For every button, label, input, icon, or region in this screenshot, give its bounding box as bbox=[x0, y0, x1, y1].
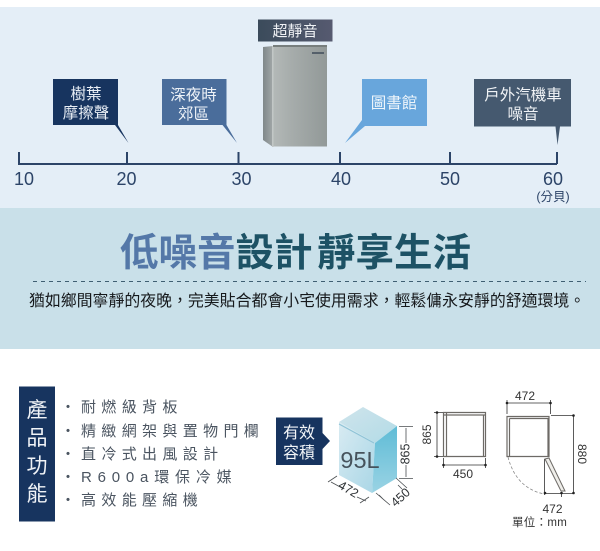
diagram: side view bbox=[420, 411, 487, 481]
panel: low noise headline bbox=[0, 208, 600, 349]
feature list: 直冷式出風設計 bbox=[81, 446, 223, 463]
callout: library 40 dB: 圖書館 bbox=[371, 94, 417, 112]
feature list: ・ bbox=[60, 492, 81, 509]
icon: capacity cube 95L: 865 bbox=[398, 444, 412, 464]
decibel axis: 10 bbox=[14, 169, 34, 189]
decibel axis: 30 bbox=[231, 169, 252, 189]
feature title: 產 bbox=[26, 399, 48, 422]
feature title: 品 bbox=[26, 427, 48, 450]
diagram: side view: 865 bbox=[420, 424, 434, 445]
label: super quiet bbox=[258, 20, 332, 42]
feature title bbox=[19, 386, 55, 522]
decibel axis: (分貝) bbox=[536, 190, 570, 204]
callout: tree leaves 20 dB bbox=[53, 79, 128, 143]
feature list: ・ bbox=[60, 399, 81, 416]
label: effective capacity: 容積 bbox=[283, 444, 315, 462]
feature list: R600a環保冷媒 bbox=[81, 469, 237, 486]
decibel axis: 20 bbox=[116, 169, 137, 189]
callout: car noise 60 dB bbox=[474, 79, 571, 145]
callout: library 40 dB bbox=[345, 79, 427, 143]
description text: 猶如鄉間寧靜的夜晚，完美貼合都會小宅使用需求，輕鬆傭永安靜的舒適環境。 bbox=[29, 291, 585, 310]
feature title: 能 bbox=[26, 483, 48, 506]
callout: car noise 60 dB: 戶外汽機車 bbox=[484, 86, 562, 104]
label: effective capacity bbox=[276, 418, 330, 465]
feature list: 耐燃級背板 bbox=[81, 399, 183, 416]
icon: capacity cube 95L: 472 bbox=[336, 478, 361, 501]
unit note: 單位：mm bbox=[512, 515, 567, 529]
callout: tree leaves 20 dB: 摩擦聲 bbox=[63, 104, 109, 122]
callout: suburb at night 30 dB: 郊區 bbox=[178, 105, 209, 123]
diagram: door open top view bbox=[506, 389, 589, 529]
label: super quiet: 超靜音 bbox=[272, 23, 318, 40]
diagram: door open top view: 472 bbox=[515, 389, 535, 403]
panel: noise scale bbox=[0, 7, 600, 208]
decibel axis bbox=[14, 152, 570, 204]
icon: capacity cube 95L bbox=[328, 407, 413, 510]
diagram: door open top view: 472 bbox=[542, 502, 563, 516]
feature list bbox=[60, 399, 264, 509]
feature list: ・ bbox=[60, 446, 81, 463]
feature title: 功 bbox=[26, 455, 48, 478]
feature list: ・ bbox=[60, 469, 81, 486]
callout: suburb at night 30 dB bbox=[162, 79, 237, 143]
icon: capacity cube 95L: 450 bbox=[388, 485, 413, 510]
callout: car noise 60 dB: 噪音 bbox=[507, 105, 539, 123]
diagram: side view: 450 bbox=[453, 467, 473, 481]
icon: refrigerator bbox=[263, 45, 327, 147]
callout: suburb at night 30 dB: 深夜時 bbox=[170, 86, 217, 104]
feature list: 高效能壓縮機 bbox=[81, 492, 203, 509]
feature list: ・ bbox=[60, 423, 81, 440]
diagram: door open top view: 880 bbox=[575, 444, 589, 464]
feature list: 精緻網架與置物門欄 bbox=[81, 422, 264, 440]
panel: product features bbox=[19, 386, 264, 522]
cube dimensions bbox=[328, 426, 413, 505]
heading: 低噪音設計 靜享生活 bbox=[120, 232, 471, 275]
decibel axis: 50 bbox=[440, 169, 460, 189]
decibel axis: 40 bbox=[331, 169, 351, 189]
icon: capacity cube 95L: 95L bbox=[340, 447, 380, 473]
label: effective capacity: 有效 bbox=[283, 424, 315, 442]
callout: tree leaves 20 dB: 樹葉 bbox=[70, 85, 102, 103]
decibel axis: 60 bbox=[543, 169, 563, 189]
